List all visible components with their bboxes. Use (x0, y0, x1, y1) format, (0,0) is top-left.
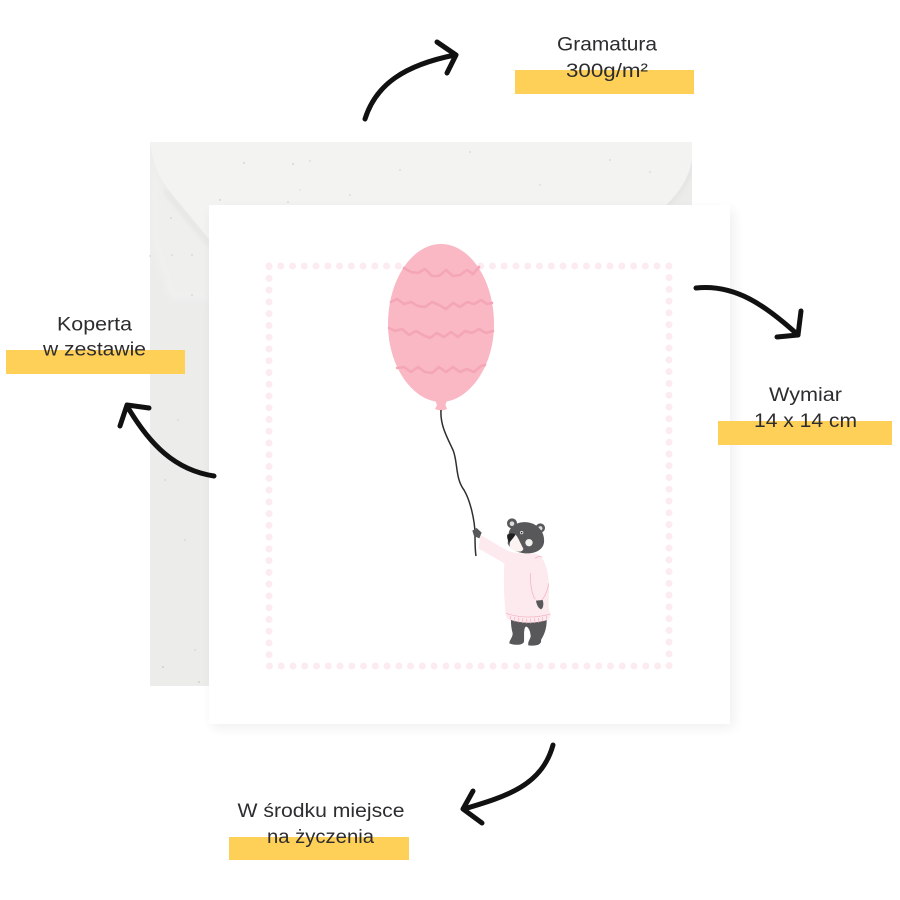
greeting card (209, 205, 730, 724)
envelope (149, 142, 692, 686)
label: inside (229, 801, 409, 860)
muzzle (510, 535, 523, 552)
eye and cheek (520, 531, 523, 534)
label: size: 14 x 14 cm (754, 411, 857, 432)
balloon (388, 244, 494, 410)
arrow: to weight label (365, 42, 456, 119)
label: weight: Gramatura (557, 34, 657, 56)
label: weight: 300g/m² (566, 61, 648, 82)
head (508, 522, 544, 553)
label: weight (515, 34, 694, 94)
label: envelope (6, 314, 185, 374)
envelope flap (150, 142, 692, 239)
sweater paw (536, 600, 543, 609)
sweater (478, 535, 551, 623)
nose (507, 533, 515, 542)
arrow: to envelope label (120, 405, 214, 476)
envelope paper speckles (149, 151, 651, 683)
label: size: Wymiar (769, 385, 843, 406)
arrow: to inside label (463, 745, 553, 823)
arrow: to size label (696, 288, 801, 337)
legs (509, 617, 547, 646)
label: inside: W środku miejsce (238, 801, 404, 822)
bear with sweater (472, 518, 551, 646)
sweater details (506, 557, 550, 623)
ears (507, 518, 517, 528)
balloon zigzag stripes (389, 267, 493, 373)
label: size (718, 385, 892, 445)
balloon knot (435, 400, 447, 410)
card shadow (212, 210, 734, 728)
label: inside: na życzenia (267, 827, 374, 848)
dotted pink frame (269, 266, 669, 666)
raised hand (472, 528, 482, 538)
label: envelope: w zestawie (42, 340, 146, 360)
label: envelope: Koperta (57, 314, 132, 336)
balloon string (441, 410, 476, 556)
